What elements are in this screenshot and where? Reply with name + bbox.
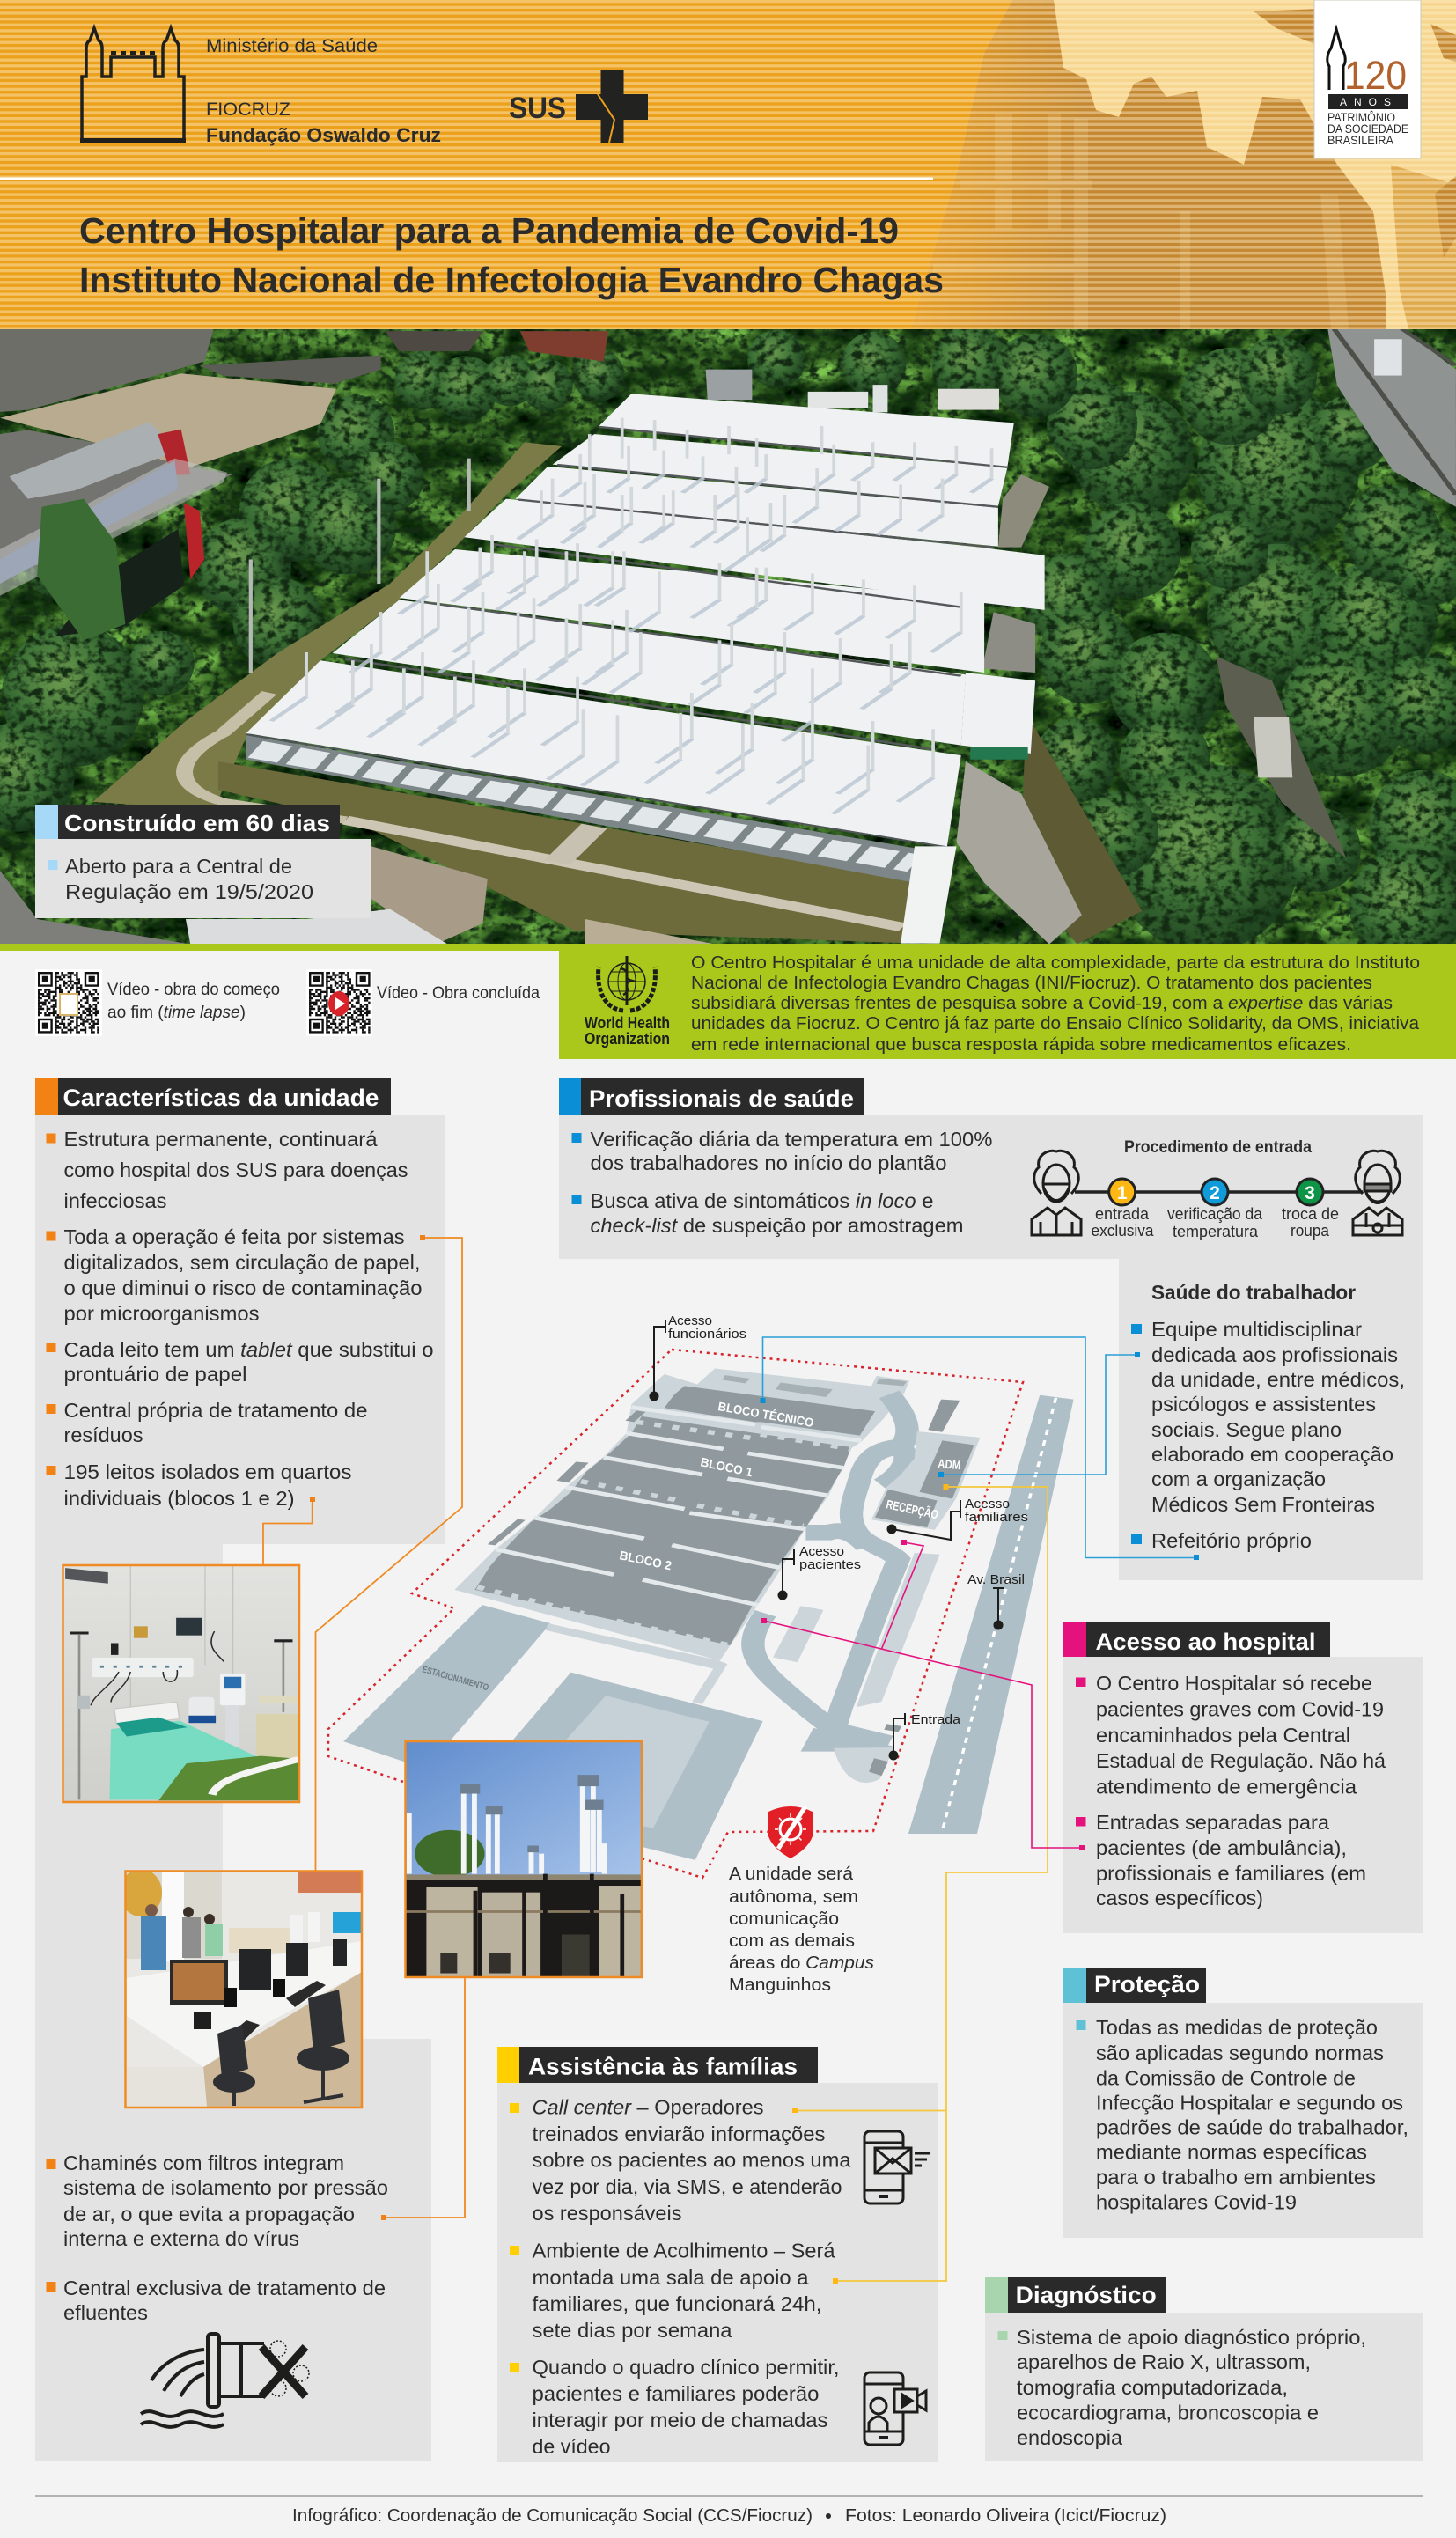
text: proteção: mediante normas específicas	[1096, 2141, 1367, 2164]
text: diagnóstico: endoscopia	[1017, 2426, 1122, 2449]
text: autonomous unit note	[729, 1864, 874, 1995]
text: características list: digitalizados, sem circulação de papel,	[63, 1251, 421, 1274]
photo: control room	[120, 1869, 363, 2108]
chart: entry procedure steps	[1032, 1138, 1402, 1240]
text: autonomous unit note: A unidade será	[729, 1864, 854, 1884]
connector end squares	[310, 1235, 1199, 2284]
text: proteção: hospitalares Covid-19	[1096, 2190, 1297, 2213]
panel: intro with WHO logo: Organization	[585, 1030, 670, 1048]
text: características list: 195 leitos isolados em quartos	[63, 1460, 352, 1483]
text: profissionais list: dos trabalhadores no início do plantão	[590, 1151, 947, 1174]
heading: diagnóstico: Diagnóstico	[1016, 2282, 1157, 2308]
text: características list: Cada leito tem um tablet que substitui o	[63, 1338, 433, 1361]
text: autonomous unit note: com as demais	[729, 1931, 855, 1951]
panel: construído em 60 dias	[35, 805, 371, 918]
heading: profissionais de saúde	[559, 1078, 864, 1115]
text: características list: por microorganismos	[63, 1302, 259, 1325]
text: Ministério da Saúde / Fiocruz: Ministério da Saúde	[206, 36, 378, 56]
map pins and labels: Av. Brasil	[967, 1572, 1025, 1587]
icon: no-virus shield	[768, 1806, 813, 1858]
text: características list: sistema de isolamento por pressão	[63, 2176, 388, 2199]
text: características list: resíduos	[63, 1423, 143, 1446]
chart: entry procedure steps: roupa	[1291, 1222, 1330, 1240]
map pins and labels: Entrada	[911, 1712, 961, 1727]
badge: 120 anos: 120	[1344, 53, 1407, 98]
chart: entry procedure steps: 3	[1305, 1183, 1315, 1203]
panel: intro with WHO logo: em rede internacional que busca resposta rápida sobre medicamentos eficazes.	[691, 1034, 1351, 1055]
text: assistência list: sete dias por semana	[532, 2319, 732, 2342]
text: proteção: Infecção Hospitalar e segundo os	[1096, 2092, 1403, 2115]
icon: worker before entry	[1032, 1151, 1081, 1235]
text: acesso list: encaminhados pela Central	[1096, 1724, 1350, 1747]
icon: phone with video call	[864, 2372, 926, 2445]
text: assistência list: Call center – Operadores	[532, 2095, 764, 2118]
QR code: video obra concluída: Vídeo - Obra concluída	[377, 984, 540, 1003]
text: acesso list: profissionais e familiares (em	[1096, 1862, 1366, 1885]
connectors: yellow	[795, 1487, 1048, 2281]
panel: diagnóstico background	[985, 2313, 1423, 2461]
panel: intro with WHO logo: World Health	[585, 1014, 670, 1032]
text: diagnóstico	[998, 2326, 1366, 2449]
title: Instituto Nacional de Infectologia Evandro Chagas	[79, 260, 944, 300]
panel: profissionais background	[559, 1115, 1423, 1580]
icon: SUS logo: SUS	[509, 92, 566, 125]
text: características list: prontuário de papel	[63, 1363, 246, 1386]
panel: características background	[35, 1115, 445, 2461]
text: saúde do trabalhador: Equipe multidisciplinar	[1151, 1318, 1362, 1341]
connectors: magenta	[764, 1542, 1083, 1848]
panel: acesso background	[1063, 1657, 1423, 1933]
chart: entry procedure steps: entrada	[1095, 1205, 1150, 1223]
header banner	[0, 0, 1456, 329]
heading: características da unidade: Características da unidade	[63, 1085, 379, 1111]
chart: entry procedure steps: 1	[1117, 1183, 1128, 1203]
text: características list: Estrutura permanente, continuará	[63, 1128, 378, 1151]
text: Ministério da Saúde / Fiocruz	[206, 36, 441, 146]
heading: proteção	[1063, 1968, 1206, 2003]
text: características list: infecciosas	[63, 1189, 167, 1212]
map labels: building names: BLOCO 2	[618, 1548, 673, 1572]
icon: phone with message	[864, 2131, 930, 2203]
text: saúde do trabalhador: Médicos Sem Fronteiras	[1151, 1493, 1375, 1516]
chart: entry procedure steps: 2	[1210, 1183, 1220, 1203]
QR code: video time lapse	[35, 969, 280, 1036]
badge: 120 anos	[1314, 0, 1421, 158]
icon: World Health Organization emblem	[599, 956, 655, 1011]
connectors: orange	[263, 1238, 465, 2218]
heading: acesso ao hospital	[1063, 1622, 1330, 1657]
text: assistência list: treinados enviarão informações	[532, 2122, 826, 2145]
map labels: building names	[421, 1399, 961, 1693]
text: acesso list: casos específicos)	[1096, 1887, 1263, 1909]
footer	[35, 2495, 1423, 2526]
text: saúde do trabalhador: dedicada aos profissionais	[1151, 1343, 1398, 1366]
text: proteção: são aplicadas segundo normas	[1096, 2041, 1384, 2064]
panel: intro with WHO logo: unidades da Fiocruz. O Centro já faz parte do Ensaio Clínico Solidarity, da OMS, iniciativa	[691, 1013, 1420, 1034]
panel: intro with WHO logo: Nacional de Infectologia Evandro Chagas (INI/Fiocruz). O tratamento dos pacientes	[691, 973, 1372, 993]
text: diagnóstico: Sistema de apoio diagnóstico próprio,	[1017, 2326, 1366, 2349]
text: características list: de ar, o que evita a propagação	[63, 2203, 355, 2225]
text: características list: Central própria de tratamento de	[63, 1399, 368, 1422]
panel: construído em 60 dias: Aberto para a Central de	[65, 855, 292, 878]
chart: entry procedure steps: verificação da	[1167, 1205, 1263, 1223]
icon: SUS logo	[509, 70, 648, 143]
text: assistência list: os responsáveis	[532, 2202, 681, 2225]
text: saúde do trabalhador: elaborado em cooperação	[1151, 1443, 1393, 1466]
map labels: building names: BLOCO TÉCNICO	[717, 1399, 815, 1430]
text: assistência list: sobre os pacientes ao menos uma	[532, 2148, 851, 2171]
icon: effluent treatment pipe	[141, 2334, 309, 2427]
text: profissionais list	[572, 1128, 993, 1237]
QR code: video obra concluída	[306, 969, 540, 1036]
heading: diagnóstico	[985, 2277, 1166, 2313]
badge: 120 anos: DA SOCIEDADE	[1327, 121, 1408, 136]
text: características list: o que diminui o risco de contaminação	[63, 1276, 422, 1299]
chart: entry procedure steps: Procedimento de entrada	[1124, 1138, 1312, 1157]
text: saúde do trabalhador: Saúde do trabalhador	[1151, 1281, 1356, 1304]
footer: Fotos: Leonardo Oliveira (Icict/Fiocruz)	[845, 2506, 1166, 2526]
text: autonomous unit note: Manguinhos	[729, 1975, 831, 1995]
text: autonomous unit note: áreas do Campus	[729, 1953, 874, 1973]
panel: intro with WHO logo	[559, 944, 1456, 1059]
text: autonomous unit note: comunicação	[729, 1909, 839, 1929]
text: proteção: Todas as medidas de proteção	[1096, 2016, 1378, 2039]
text: diagnóstico: ecocardiograma, broncoscopia e	[1017, 2402, 1319, 2424]
text: assistência list: interagir por meio de chamadas	[532, 2409, 827, 2431]
panel: proteção background	[1063, 2003, 1423, 2238]
text: acesso list	[1076, 1672, 1386, 1909]
photo: hospital bed	[61, 1564, 303, 1803]
text: acesso list: Entradas separadas para	[1096, 1811, 1329, 1834]
text: saúde do trabalhador: psicólogos e assistentes	[1151, 1393, 1376, 1416]
site map	[343, 1368, 1074, 1860]
chart: entry procedure steps: exclusiva	[1092, 1222, 1154, 1240]
text: profissionais list: Verificação diária da temperatura em 100%	[590, 1128, 993, 1151]
text: assistência list: pacientes e familiares poderão	[532, 2382, 819, 2405]
title	[79, 210, 944, 300]
text: diagnóstico: aparelhos de Raio X, ultrassom,	[1017, 2350, 1311, 2373]
map pins and labels: Acesso	[668, 1313, 712, 1328]
text: assistência list: montada uma sala de apoio a	[532, 2266, 809, 2289]
text: características list: Central exclusiva de tratamento de	[63, 2277, 386, 2299]
text: diagnóstico: tomografia computadorizada,	[1017, 2376, 1288, 2399]
panel: intro with WHO logo: subsidiará diversas frentes de pesquisa sobre a Covid-19, com a expertise das várias	[691, 993, 1393, 1013]
aerial photo of the hospital	[0, 325, 1456, 964]
heading: assistência às famílias	[497, 2047, 818, 2083]
text: proteção: da Comissão de Controle de	[1096, 2067, 1356, 2090]
map labels: building names: BLOCO 1	[699, 1454, 754, 1479]
text: características list: Chaminés com filtros integram	[63, 2152, 344, 2174]
connectors: blue	[762, 1337, 1196, 1558]
text: assistência list: Quando o quadro clínico permitir,	[532, 2356, 840, 2379]
chart: entry procedure steps: temperatura	[1173, 1223, 1259, 1240]
map pins and labels: Acesso	[799, 1544, 844, 1559]
text: saúde do trabalhador: da unidade, entre médicos,	[1151, 1368, 1405, 1391]
text: Ministério da Saúde / Fiocruz: FIOCRUZ	[206, 99, 290, 120]
heading: acesso ao hospital: Acesso ao hospital	[1095, 1629, 1315, 1655]
text: características list: como hospital dos SUS para doenças	[63, 1159, 408, 1181]
map pins and labels: pacientes	[799, 1557, 861, 1572]
map labels: building names: RECEPÇÃO	[885, 1496, 940, 1521]
text: proteção: para o trabalho em ambientes	[1096, 2166, 1376, 2189]
text: acesso list: O Centro Hospitalar só recebe	[1096, 1672, 1372, 1695]
QR code: video time lapse: ao fim (time lapse)	[107, 1004, 246, 1022]
text: saúde do trabalhador: Refeitório próprio	[1151, 1529, 1312, 1552]
map pins and labels: funcionários	[668, 1327, 746, 1342]
heading: proteção: Proteção	[1094, 1971, 1200, 1997]
text: profissionais list: check-list de suspeição por amostragem	[590, 1214, 963, 1237]
text: assistência list	[510, 2095, 851, 2458]
text: características list: Toda a operação é feita por sistemas	[63, 1225, 404, 1248]
map labels: building names: ADM	[938, 1456, 961, 1472]
badge: 120 anos: PATRIMÔNIO	[1327, 110, 1395, 124]
text: assistência list: familiares, que funcionará 24h,	[532, 2292, 822, 2315]
map pins and labels: familiares	[965, 1510, 1028, 1525]
footer: Infográfico: Coordenação de Comunicação Social (CCS/Fiocruz)	[292, 2506, 813, 2526]
text: assistência list: de vídeo	[532, 2435, 611, 2458]
icon: Fiocruz castle logo	[80, 28, 186, 141]
title: Centro Hospitalar para a Pandemia de Covid-19	[79, 210, 899, 251]
badge: 120 anos: BRASILEIRA	[1327, 133, 1394, 147]
text: assistência list: vez por dia, via SMS, e atenderão	[532, 2175, 842, 2198]
text: Ministério da Saúde / Fiocruz: Fundação Oswaldo Cruz	[206, 124, 441, 146]
text: acesso list: atendimento de emergência	[1096, 1775, 1357, 1798]
panel: assistência background	[497, 2083, 938, 2462]
text: assistência list: Ambiente de Acolhimento – Será	[532, 2240, 835, 2262]
panel: intro with WHO logo: O Centro Hospitalar é uma unidade de alta complexidade, parte da estrutura do Instituto	[691, 953, 1420, 973]
text: saúde do trabalhador	[1131, 1281, 1405, 1552]
panel: construído em 60 dias: Regulação em 19/5/2020	[65, 880, 313, 903]
heading: características da unidade	[35, 1078, 391, 1115]
QR code: video time lapse: Vídeo - obra do começo	[107, 981, 280, 999]
map pins and labels	[650, 1313, 1028, 1761]
icon: worker after entry with mask and stethoscope	[1353, 1151, 1402, 1235]
heading: profissionais de saúde: Profissionais de saúde	[589, 1085, 854, 1112]
chart: entry procedure steps: troca de	[1282, 1205, 1339, 1223]
site boundary dotted line	[328, 1350, 1023, 1878]
text: características list: interna e externa do vírus	[63, 2227, 299, 2250]
text: características list: individuais (blocos 1 e 2)	[63, 1487, 294, 1510]
text: autonomous unit note: autônoma, sem	[729, 1887, 858, 1907]
photo: chimneys	[401, 1740, 648, 1980]
text: acesso list: Estadual de Regulação. Não há	[1096, 1749, 1386, 1772]
green band under the aerial photo	[0, 944, 1456, 951]
text: acesso list: pacientes (de ambulância),	[1096, 1836, 1347, 1859]
text: saúde do trabalhador: com a organização	[1151, 1468, 1326, 1490]
text: acesso list: pacientes graves com Covid-19	[1096, 1697, 1384, 1720]
panel: construído em 60 dias: Construído em 60 dias	[64, 810, 330, 836]
text: proteção	[1076, 2016, 1408, 2213]
text: características list: efluentes	[63, 2301, 148, 2324]
map pins and labels: Acesso	[965, 1497, 1010, 1512]
text: profissionais list: Busca ativa de sintomáticos in loco e	[590, 1189, 933, 1212]
text: proteção: padrões de saúde do trabalhador,	[1096, 2116, 1408, 2139]
text: características list	[46, 1128, 433, 2324]
heading: assistência às famílias: Assistência às famílias	[528, 2053, 798, 2079]
map labels: building names: ESTACIONAMENTO	[421, 1664, 489, 1693]
text: saúde do trabalhador: sociais. Segue plano	[1151, 1418, 1342, 1441]
badge: 120 anos: ANOS	[1340, 96, 1398, 108]
